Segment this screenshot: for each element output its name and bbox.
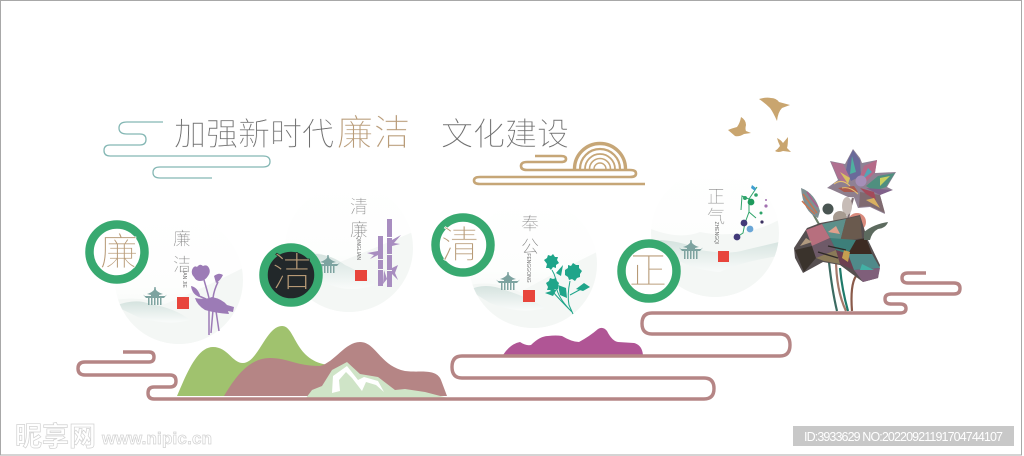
badge: 清 (436, 218, 490, 272)
heading: qing lian: 清 (350, 197, 368, 217)
watermark: site logo: www.nipic.cn (101, 429, 212, 448)
pavilion 3 (496, 272, 520, 290)
badge: 廉: 廉 (100, 232, 138, 274)
green mountain (177, 326, 330, 396)
badge: 洁: 洁 (272, 251, 312, 295)
seal 4 (718, 251, 729, 262)
chrysanthemum (544, 254, 590, 314)
title (174, 112, 569, 153)
heading: qing lian: QINGLIAN (355, 236, 361, 260)
mauve mountain (224, 342, 447, 396)
ink landscape 1 (118, 269, 243, 344)
cloud line: teal (104, 122, 270, 178)
panel: feng gong (472, 214, 597, 328)
cloud rope: mauve (78, 273, 960, 399)
heading: feng gong: FENGGONG (525, 253, 531, 283)
heading: lian jie: LIAN JIE (181, 268, 187, 289)
badge: 正 (622, 244, 676, 298)
flower head (827, 149, 896, 214)
title: 廉洁 (337, 112, 410, 153)
heading: zheng qi (707, 187, 725, 244)
heading: feng gong: 公 (521, 237, 539, 257)
badge: 洁 (264, 248, 318, 302)
watermark: site logo (15, 422, 212, 452)
ink landscape 4 (651, 221, 779, 297)
heading: qing lian: 廉 (350, 220, 368, 240)
heading: feng gong (521, 214, 539, 283)
panel: qing lian (312, 198, 413, 312)
watermark: site logo: 昵享网 (15, 422, 96, 452)
heading: feng gong: 奉 (521, 214, 539, 234)
panel: lian jie (118, 230, 243, 344)
heading: lian jie (173, 229, 191, 289)
bamboo (367, 219, 401, 287)
seal 2 (355, 270, 367, 281)
lotus silhouette (191, 265, 234, 335)
seal 1 (177, 297, 189, 309)
stems (812, 198, 856, 311)
big leaf (794, 215, 888, 282)
badge: 清: 清 (441, 225, 479, 267)
small leaf (801, 188, 820, 218)
birds (728, 98, 791, 152)
heading: qing lian (350, 197, 368, 260)
heading: zheng qi: 正 (707, 187, 725, 207)
badge: 廉 (90, 224, 144, 280)
watermark: image id (793, 426, 1014, 446)
heading: lian jie: 洁 (173, 255, 191, 275)
heading: zheng qi: 气 (707, 207, 725, 227)
pavilion 1 (143, 287, 167, 305)
purple mountain (503, 328, 643, 355)
pavilion 4 (679, 240, 703, 259)
heading: zheng qi: ZHENGQI (713, 222, 719, 244)
title: 加强新时代 (174, 116, 334, 152)
panel: zheng qi (651, 185, 779, 297)
pavilion 2 (316, 255, 340, 273)
multicolour lotus (794, 149, 896, 311)
seal 3 (523, 290, 535, 302)
heading: lian jie: 廉 (173, 229, 191, 249)
ink landscape 2 (312, 233, 413, 312)
pale rock mountain (306, 362, 448, 398)
bud and petals behind (822, 204, 834, 214)
ink landscape 3 (472, 252, 597, 328)
badge: 正: 正 (629, 251, 667, 293)
title: 文化建设 (441, 116, 569, 152)
flowering vine (734, 185, 768, 240)
watermark: image id: ID:3933629 NO:20220921191704744107 (804, 430, 1003, 444)
cloud line and sun: gold (474, 144, 645, 184)
